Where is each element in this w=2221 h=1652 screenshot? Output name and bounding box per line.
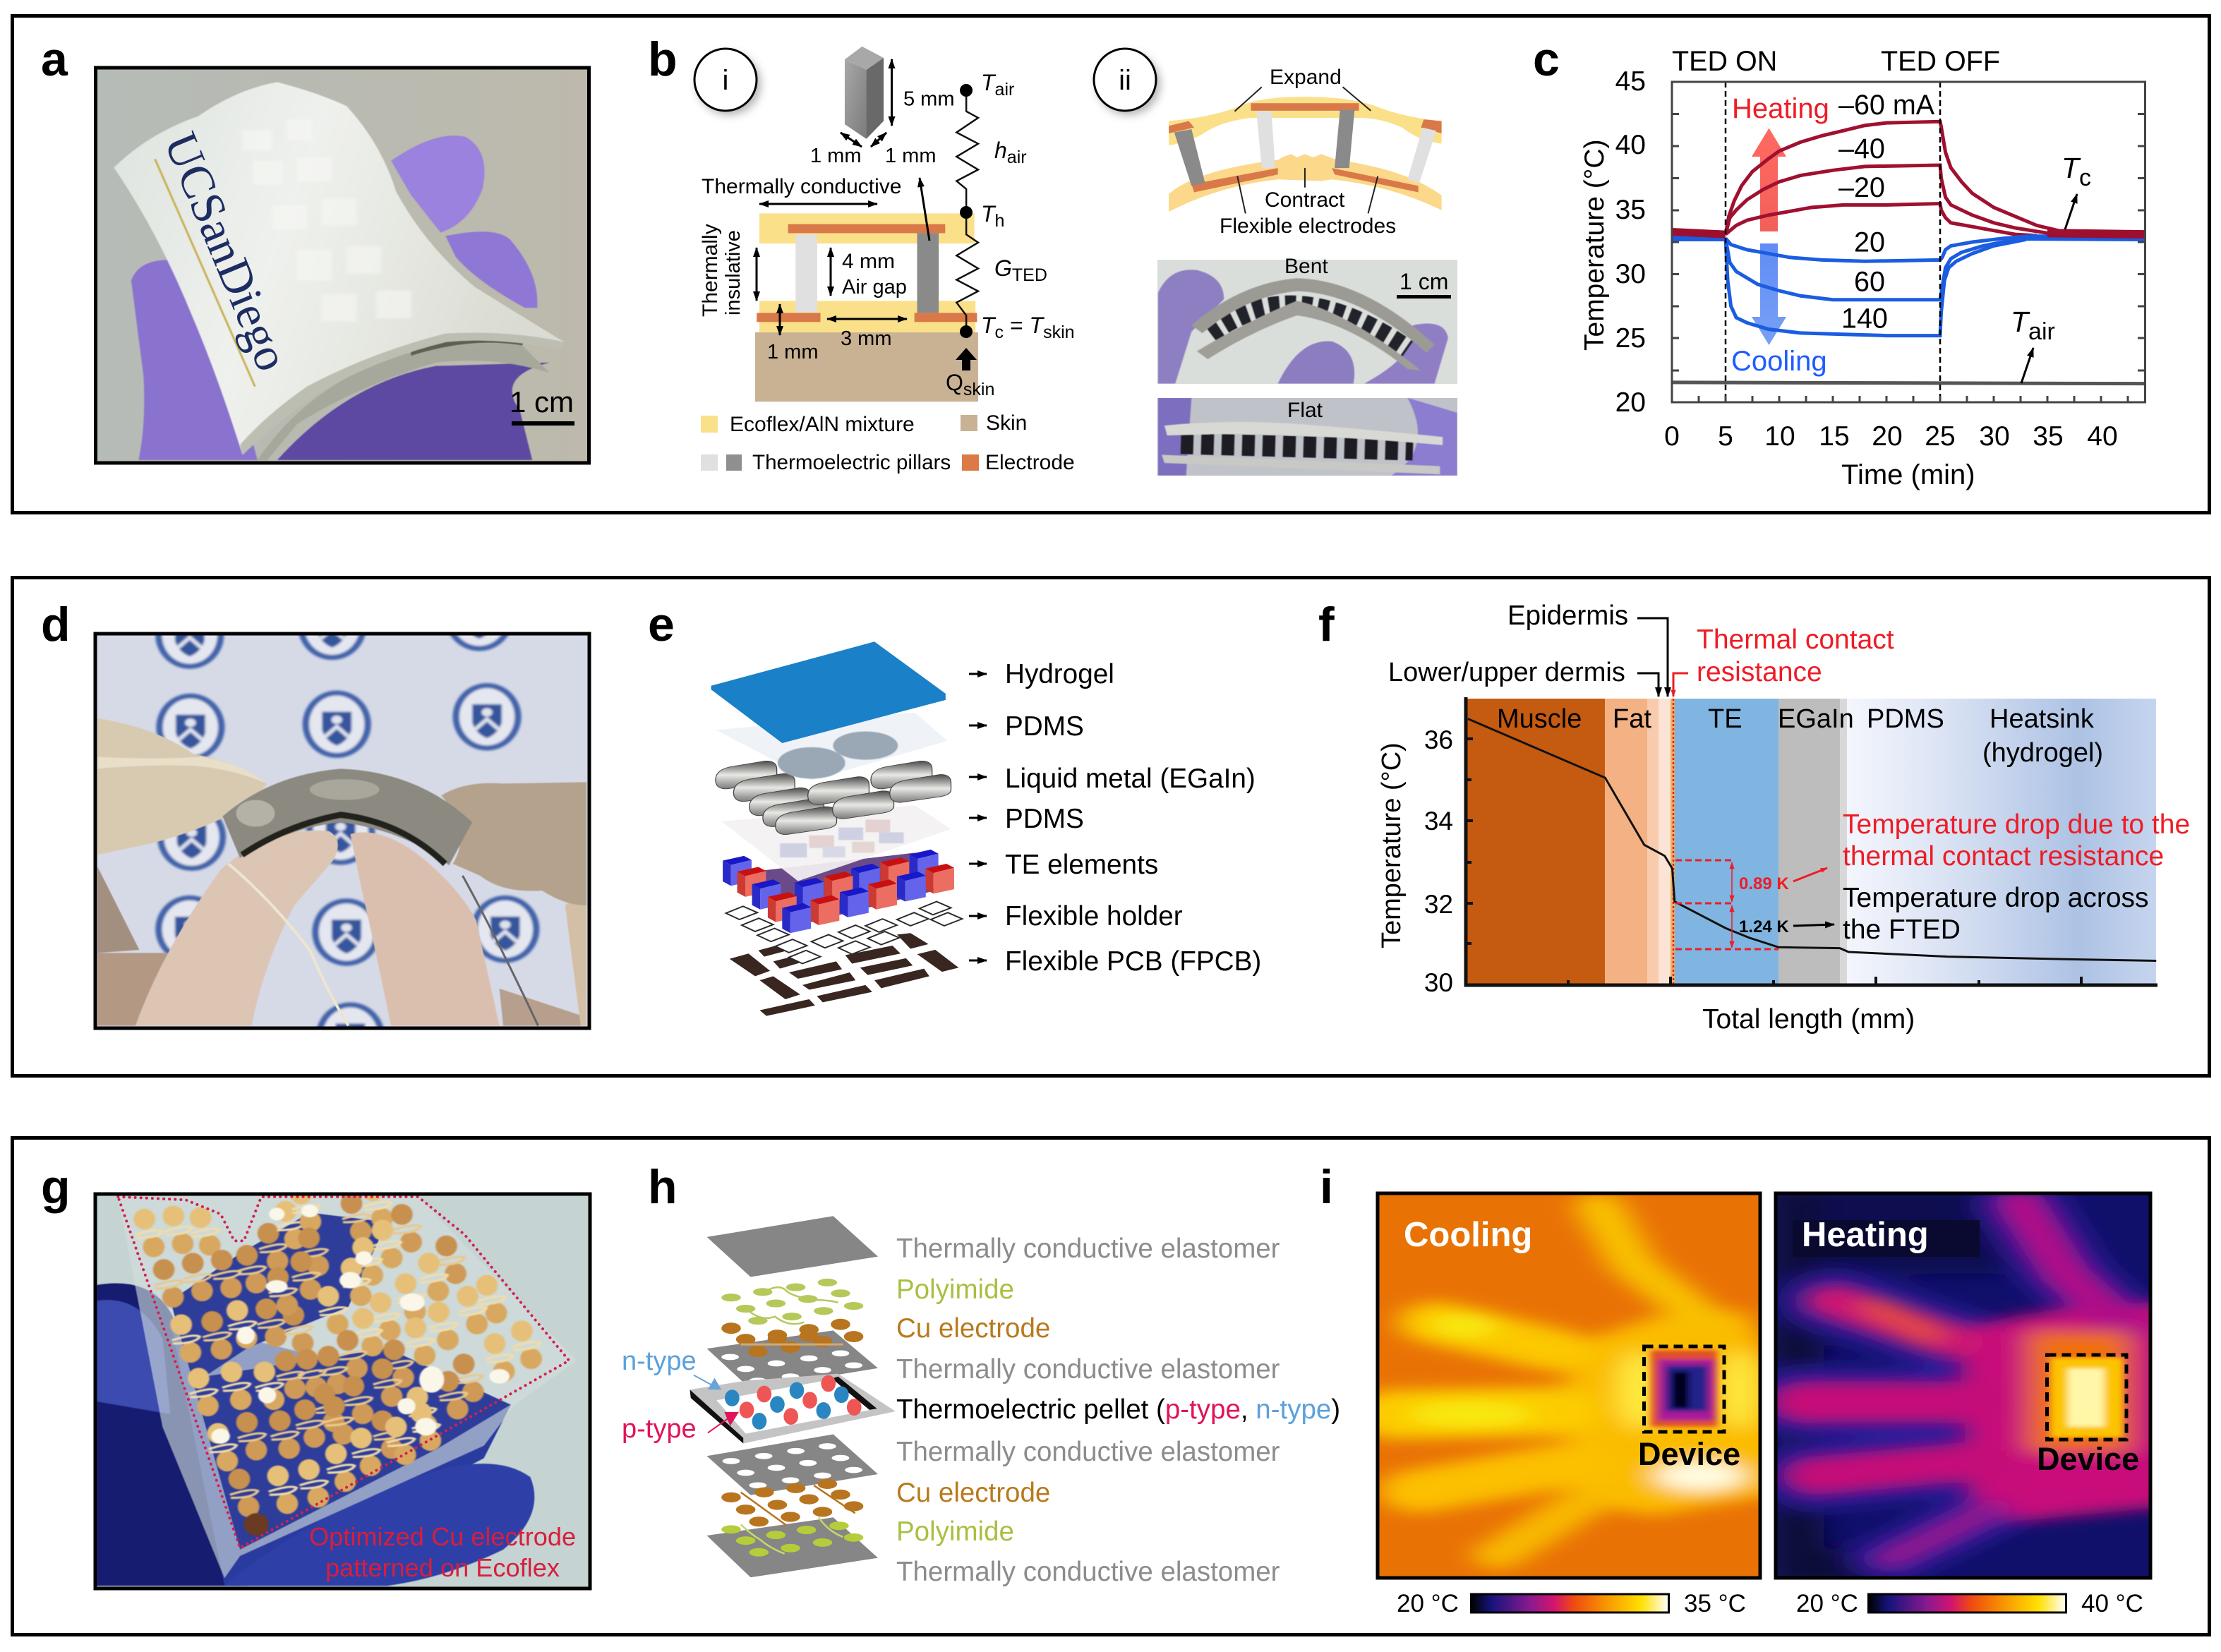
panel: top row frame (13, 16, 2209, 512)
dimension arrows (757, 59, 929, 335)
thermal contact resistance callout: resistance (1697, 657, 1822, 687)
Cu on plate (736, 1330, 843, 1357)
layer: lower PDMS (721, 805, 951, 881)
schematic labels: h (994, 138, 1007, 163)
layer names: Cu electrode (896, 1313, 1050, 1344)
label b: b (648, 32, 678, 86)
layer names: Flexible PCB (FPCB) (1005, 946, 1261, 977)
y axis numbers (1615, 66, 1646, 418)
label f: f (1318, 598, 1335, 651)
layer names (1497, 704, 2103, 768)
panel f: temperature profile (1318, 598, 2190, 1035)
circle label i: i (723, 65, 728, 96)
photo g caption: patterned on Ecoflex (325, 1553, 560, 1582)
y axis title: Temperature (°C) (1579, 139, 1610, 351)
panel g: Cu electrode photo (41, 1160, 590, 1589)
photo: bent device (1157, 260, 1457, 384)
cooling device outline (1644, 1346, 1724, 1432)
photo g: patterned copper sheet on blue glove (95, 1181, 590, 1589)
current labels: –60 mA (1838, 90, 1935, 121)
schematic labels: T (1030, 313, 1045, 338)
photo a frame (96, 68, 589, 463)
node dots (960, 84, 973, 338)
schematic labels: h (995, 211, 1004, 231)
legend (701, 411, 1075, 474)
y axis numbers: 30 (1424, 968, 1453, 997)
panel i: infrared images (1320, 1160, 2172, 1617)
colorbar heating (1796, 1590, 2143, 1617)
thermal contact resistance callout (1673, 625, 1894, 697)
x axis numbers: 40 (2087, 421, 2118, 452)
Tc annotation: T (2062, 152, 2081, 184)
colorbar heating: 20 °C (1796, 1590, 1858, 1617)
lower plate with polyimide (707, 1517, 878, 1577)
current labels: 20 (1854, 227, 1885, 258)
thermal image: heating (1773, 1188, 2172, 1586)
plot frame and ticks (1672, 82, 2145, 402)
photo labels and scale bar (1284, 255, 1451, 422)
panel: middle row frame (13, 577, 2209, 1075)
layer names: (hydrogel) (1982, 738, 2103, 768)
layer names: Thermally conductive elastomer (896, 1437, 1280, 1467)
current labels (1838, 90, 1935, 334)
current labels: –40 (1838, 133, 1885, 164)
schematic labels: T (981, 313, 997, 338)
axes (1466, 697, 2157, 985)
layer bands (1465, 699, 2156, 984)
schematic labels: 1 mm (810, 145, 861, 167)
perforated elastomer plate (707, 1330, 878, 1389)
schematic labels: 5 mm (903, 88, 954, 110)
1.24 K value: 1.24 K (1739, 917, 1789, 936)
Tc annotation: c (2079, 164, 2091, 191)
x axis numbers: 35 (2033, 421, 2064, 452)
epidermis callout: Epidermis (1507, 601, 1628, 631)
schematic labels: 3 mm (841, 327, 892, 350)
drop annotation black: Temperature drop across (1843, 883, 2149, 913)
thermoelectric pellet layer (690, 1374, 896, 1444)
drop annotation red (1843, 809, 2190, 872)
chart headings (1672, 46, 2000, 77)
colorbar cooling: 20 °C (1397, 1590, 1459, 1617)
data curves (1672, 121, 2145, 384)
thermal image: cooling (1376, 1193, 1778, 1579)
layer: flexible holder (726, 902, 962, 964)
photo d: fingers bending device over logo paper (97, 635, 587, 1026)
thermal contact resistance callout: Thermal contact (1697, 625, 1894, 655)
layer names: Polyimide (896, 1274, 1014, 1305)
layer names: Heatsink (1990, 704, 2095, 734)
drop annotation red: Temperature drop due to the (1843, 809, 2190, 840)
layer names: TE (1708, 704, 1743, 734)
photo g caption: Optimized Cu electrode (309, 1522, 576, 1551)
top polyimide layer (721, 1279, 863, 1325)
layer: TE elements (723, 850, 954, 933)
layer arrows (969, 674, 987, 960)
schematic ii labels: Flexible electrodes (1220, 215, 1396, 238)
dermis callout: Lower/upper dermis (1388, 658, 1625, 687)
heating device label: Device (2037, 1441, 2139, 1477)
schematic labels: skin (1043, 322, 1075, 342)
schematic labels: T (981, 201, 997, 227)
layer names: Thermally conductive elastomer (896, 1234, 1280, 1264)
legend: Thermoelectric pillars (752, 451, 951, 474)
photo: flat device (1157, 398, 1457, 476)
n-type pointer (694, 1375, 721, 1389)
temperature curve (1468, 719, 2156, 960)
colorbar cooling (1397, 1590, 1746, 1617)
panel d: photo of bent FTED (41, 586, 589, 1067)
Tc annotation (2062, 152, 2091, 229)
y axis title: Temperature (°C) (1377, 742, 1407, 948)
schematic labels: Air gap (842, 276, 907, 299)
schematic labels (699, 70, 1075, 399)
schematic labels: 4 mm (842, 250, 895, 273)
panel c: temperature vs time chart (1533, 32, 2145, 490)
drop annotation black: the FTED (1843, 915, 1961, 945)
epidermis callout (1507, 601, 1668, 697)
layer names: Muscle (1497, 704, 1582, 734)
schematic ii labels: Contract (1265, 188, 1345, 212)
layer names (1005, 659, 1261, 977)
exploded layer stack illustration (711, 641, 962, 1016)
schematic labels: Thermally (699, 224, 722, 317)
photo g frame (95, 1194, 590, 1588)
cooling device label: Device (1638, 1436, 1740, 1472)
layer names: TE elements (1005, 850, 1158, 880)
cooling label: Cooling (1731, 346, 1827, 377)
panel a: device photo (41, 32, 589, 463)
schematic labels: Thermally conductive (702, 175, 901, 198)
schematic labels: T (981, 70, 997, 95)
schematic ii labels (1220, 66, 1396, 238)
layer: hydrogel (711, 641, 946, 743)
label e: e (648, 598, 675, 651)
top elastomer plate (707, 1216, 878, 1277)
lower perforated elastomer plate (707, 1434, 878, 1495)
0.89 K value: 0.89 K (1739, 874, 1789, 893)
device cross-section schematic (755, 47, 978, 402)
schematic labels: G (994, 255, 1012, 281)
current labels: 140 (1841, 303, 1888, 334)
panel e: exploded view (648, 598, 1261, 1016)
y axis numbers (1424, 725, 1453, 997)
lower Cu layer (721, 1479, 863, 1526)
layer: liquid metal (716, 761, 951, 835)
y axis numbers: 32 (1424, 890, 1453, 919)
chart headings: TED ON (1672, 46, 1777, 77)
photo d frame (95, 634, 589, 1028)
y axis numbers: 20 (1615, 387, 1646, 418)
exploded stack illustration (690, 1216, 896, 1577)
layer: upper PDMS (716, 713, 947, 780)
photo a: bent device held in purple glove (95, 68, 589, 463)
label c: c (1533, 32, 1560, 86)
layer names: Liquid metal (EGaIn) (1005, 764, 1256, 794)
top Cu layer (721, 1319, 863, 1342)
photo g caption (309, 1522, 576, 1582)
schematic labels: c (995, 322, 1004, 342)
label a: a (41, 32, 68, 86)
layer names: PDMS (1005, 804, 1084, 834)
drop annotation black (1843, 883, 2149, 945)
TED on/off dashed lines (1726, 82, 1940, 402)
legend: Skin (986, 411, 1027, 435)
layer names: PDMS (1867, 704, 1944, 734)
y axis numbers: 25 (1615, 323, 1646, 354)
label h: h (648, 1160, 678, 1214)
panel h: exploded view of thermoelectric stack (622, 1160, 1340, 1587)
layer names: EGaIn (1778, 704, 1854, 734)
x axis numbers: 0 (1664, 421, 1680, 452)
n-type label: n-type (622, 1346, 697, 1376)
schematic labels: 1 mm (767, 341, 819, 363)
colorbar heating: 40 °C (2081, 1590, 2143, 1617)
heating title box (1793, 1220, 1980, 1257)
heating arrow (1752, 128, 1786, 231)
panel b: device structure (648, 32, 1457, 476)
heating title: Heating (1802, 1216, 1929, 1254)
legend: Ecoflex/AlN mixture (730, 413, 915, 436)
schematic labels: 1 mm (885, 145, 936, 167)
y axis numbers: 35 (1615, 195, 1646, 225)
heating label: Heating (1732, 93, 1829, 124)
heat flux arrow (956, 348, 977, 370)
current labels: 60 (1854, 267, 1885, 298)
photo labels and scale bar: Flat (1287, 399, 1323, 422)
label d: d (41, 598, 71, 651)
schematic labels: air (1007, 147, 1027, 167)
schematic labels: Q (946, 370, 963, 395)
drop annotation red: thermal contact resistance (1843, 841, 2164, 872)
schematic labels: = (1004, 313, 1030, 338)
panel: bottom row frame (13, 1138, 2209, 1634)
layer names: Polyimide (896, 1517, 1014, 1547)
p-type label: p-type (622, 1414, 697, 1444)
Tair annotation: air (2028, 318, 2055, 345)
schematic ii labels: Expand (1270, 66, 1342, 89)
layer names: Thermoelectric pellet (p-type, n-type) (896, 1394, 1340, 1425)
chart headings: TED OFF (1881, 46, 2000, 77)
circle label ii (1094, 49, 1160, 115)
drop brackets (1675, 860, 1778, 949)
legend: Electrode (985, 451, 1075, 474)
bending schematic ii (1169, 87, 1442, 213)
dermis callout (1388, 658, 1659, 697)
x axis numbers (1664, 421, 2118, 452)
cooling title: Cooling (1404, 1216, 1532, 1254)
schematic labels: air (995, 80, 1014, 100)
photo labels and scale bar: 1 cm (1400, 269, 1448, 294)
x axis numbers: 30 (1979, 421, 2010, 452)
scale bar a: 1 cm (510, 385, 574, 418)
circle label i (694, 49, 761, 115)
circle label ii: ii (1119, 65, 1131, 96)
label i: i (1320, 1160, 1333, 1214)
layer names: Thermally conductive elastomer (896, 1354, 1280, 1385)
layer: flexible PCB (730, 933, 958, 1016)
cooling frame (1378, 1193, 1760, 1578)
UC San Diego logo: UCSanDiego (154, 125, 299, 378)
layer names: Fat (1613, 704, 1651, 734)
photo labels and scale bar: Bent (1284, 255, 1328, 278)
colorbar cooling: 35 °C (1684, 1590, 1746, 1617)
y axis numbers: 30 (1615, 259, 1646, 289)
value arrows (1793, 868, 1834, 926)
x axis numbers: 10 (1764, 421, 1795, 452)
schematic labels: skin (963, 380, 994, 399)
y axis numbers: 34 (1424, 807, 1453, 836)
heating frame (1776, 1193, 2150, 1578)
layer names: Hydrogel (1005, 659, 1114, 689)
x axis numbers: 5 (1718, 421, 1733, 452)
layer names: Thermally conductive elastomer (896, 1557, 1280, 1587)
x axis numbers: 25 (1925, 421, 1956, 452)
Tair annotation (2011, 306, 2055, 383)
layer names (896, 1234, 1340, 1587)
heating device outline (2047, 1355, 2126, 1440)
label g: g (41, 1160, 71, 1214)
y axis numbers: 45 (1615, 66, 1646, 97)
schematic labels: TED (1012, 265, 1047, 285)
Tair annotation: T (2011, 306, 2030, 338)
x axis title: Total length (mm) (1702, 1004, 1915, 1035)
y axis numbers: 40 (1615, 130, 1646, 160)
current labels: –20 (1838, 172, 1885, 203)
x axis numbers: 20 (1872, 421, 1903, 452)
y axis numbers: 36 (1424, 725, 1453, 754)
layer names: PDMS (1005, 711, 1084, 742)
x axis numbers: 15 (1819, 421, 1850, 452)
x axis title: Time (min) (1841, 459, 1975, 490)
layer names: Cu electrode (896, 1478, 1050, 1508)
cooling arrow (1752, 243, 1786, 345)
layer names: Flexible holder (1005, 901, 1183, 931)
schematic labels: insulative (722, 230, 745, 315)
p-type pointer (708, 1412, 739, 1433)
thermal contact dotted line (1673, 699, 1674, 984)
